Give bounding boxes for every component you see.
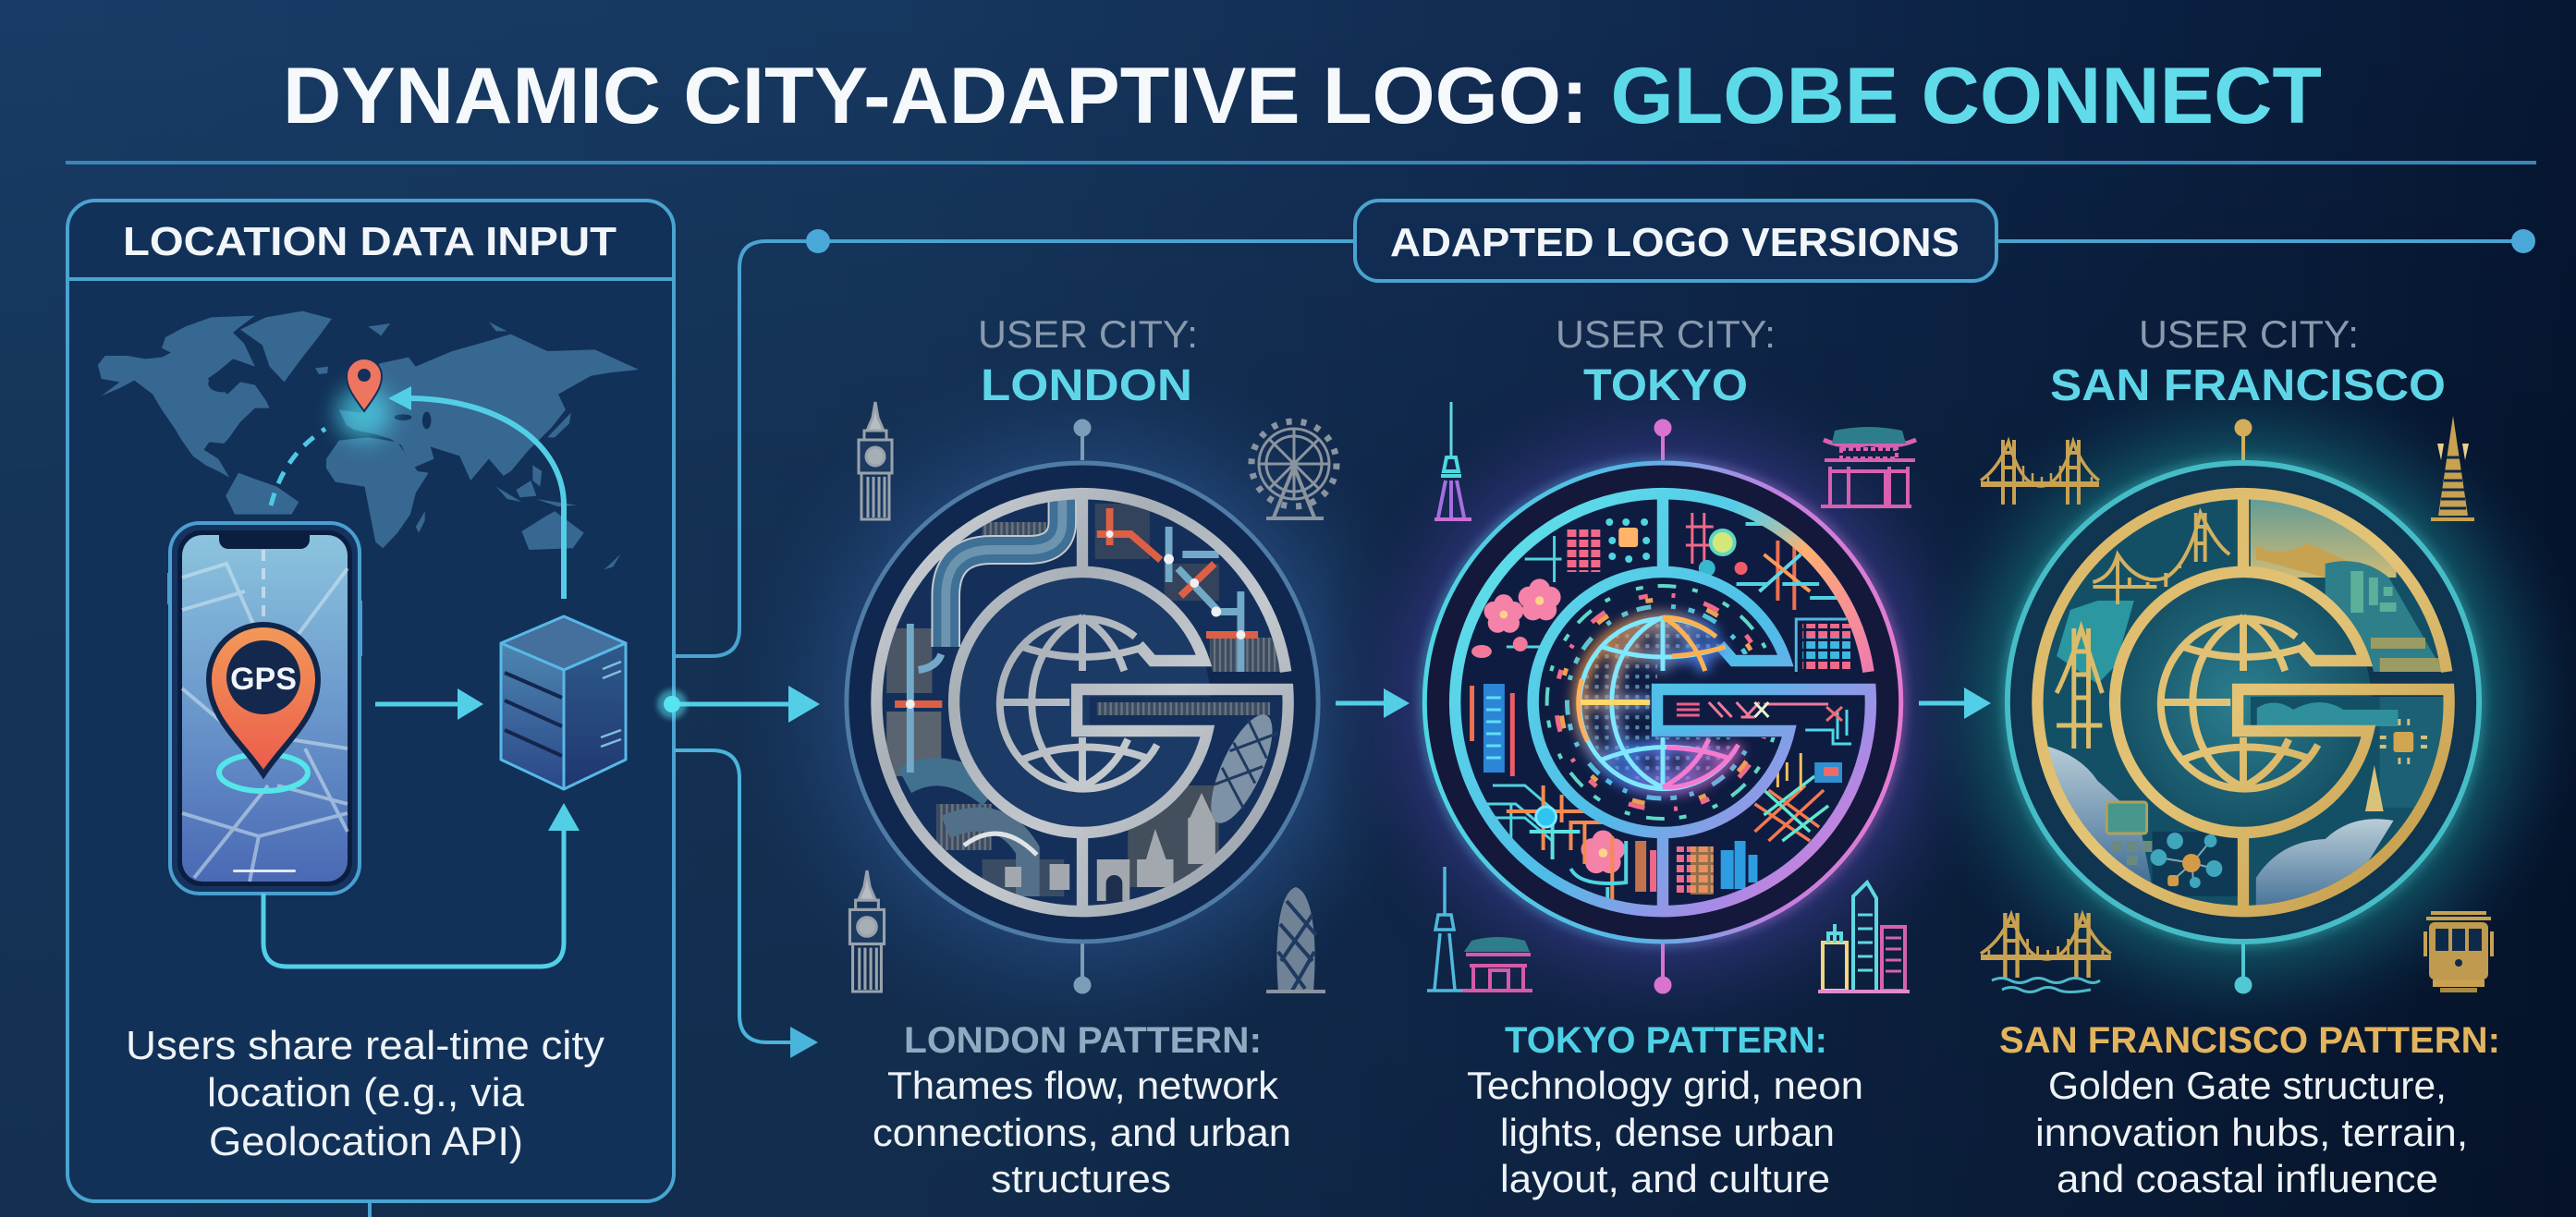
San Francisco logo [2008,463,2479,942]
icon: phone [167,523,362,894]
dashed link: map to phone [271,429,325,505]
panel description [126,1023,604,1164]
arrow: server to map [388,386,564,599]
arrow: Tokyo to San Francisco [1919,688,1991,719]
heading pill: adapted logo versions [1355,201,1996,281]
Tokyo inner circuit dots [1547,586,1778,819]
column: London: connections, and urban [873,1111,1291,1154]
column: Tokyo: lights, dense urban [1500,1111,1835,1154]
panel: location data input [67,201,674,1217]
map glow and location pin [336,359,392,441]
column: Tokyo: layout, and culture [1500,1157,1830,1200]
icon: Tokyo temple top [1821,427,1916,506]
icon: London Eye [1251,421,1337,518]
column: San Francisco: Golden Gate structure, [2048,1064,2447,1107]
icon: server cube [501,616,626,789]
column: Tokyo: TOKYO [1583,361,1748,410]
Tokyo neon globe [1578,617,1739,789]
London logo [847,463,1318,942]
San Francisco pattern text: SAN FRANCISCO PATTERN: [1999,1020,2500,1061]
column: San Francisco: innovation hubs, terrain, [2035,1111,2468,1154]
icon: Tokyo skyline bottom [1818,882,1910,992]
icon: cable car [2425,913,2492,992]
London bottom landmarks [1005,793,1215,901]
glow behind logos [726,346,2576,1057]
London map fragments [877,494,1288,910]
icon: Tokyo tower bottom [1427,867,1464,991]
London pattern text: LONDON PATTERN: [904,1020,1262,1061]
London city label: USER CITY: [978,312,1198,356]
San Francisco connector nodes [2235,420,2252,994]
column: Tokyo [1424,312,1916,1200]
Tokyo neon G [1455,493,1871,911]
Tokyo city label: USER CITY: [1556,312,1776,356]
icon: Big Ben bottom [849,870,885,992]
icon: GPS ring [219,754,308,791]
icon: Big Ben top [859,402,892,519]
San Francisco scenes [2037,493,2453,915]
arrow: phone to server lower route [263,803,580,967]
icon: Gherkin [1266,887,1325,992]
connector: branches to logos [657,229,2535,1058]
column: San Francisco [1981,312,2500,1200]
London gherkin pane [1211,714,1278,823]
icon: Tokyo tower top [1435,402,1471,519]
arrow: London to Tokyo [1336,688,1410,718]
heading pill: adapted logo versions: ADAPTED LOGO VERSIONS [1390,220,1959,265]
London connector nodes [1074,420,1091,993]
column: San Francisco: SAN FRANCISCO [2050,361,2446,410]
icon: Tokyo gate bottom [1462,937,1532,991]
icon: Transamerica pyramid [2431,416,2474,519]
column: San Francisco: and coastal influence [2057,1157,2438,1200]
Tokyo pattern text: TOKYO PATTERN: [1505,1020,1827,1061]
world map [98,311,639,570]
Tokyo logo [1424,463,1901,942]
GPS label: GPS [230,662,297,697]
title: DYNAMIC CITY-ADAPTIVE LOGO: GLOBE CONNECT [283,52,2322,140]
column: Tokyo: Technology grid, neon [1467,1064,1863,1107]
San Francisco city label: USER CITY: [2139,312,2359,356]
column: London: structures [991,1157,1171,1200]
arrow: phone to server [375,688,483,720]
icon: Golden Gate top [1981,440,2099,505]
Tokyo circuitry panels [1470,513,1851,901]
panel heading: LOCATION DATA INPUT [123,219,617,264]
panel description: Users share real-time city [126,1023,604,1068]
Tokyo connector nodes [1654,420,1671,993]
column: London: Thames flow, network [887,1064,1279,1107]
icon: GPS pin [209,625,318,774]
panel description: location (e.g., via [207,1070,525,1115]
column: London [847,312,1337,1200]
column: London: LONDON [981,361,1192,410]
icon: Golden Gate bottom [1981,913,2111,992]
panel description: Geolocation API) [209,1119,523,1164]
